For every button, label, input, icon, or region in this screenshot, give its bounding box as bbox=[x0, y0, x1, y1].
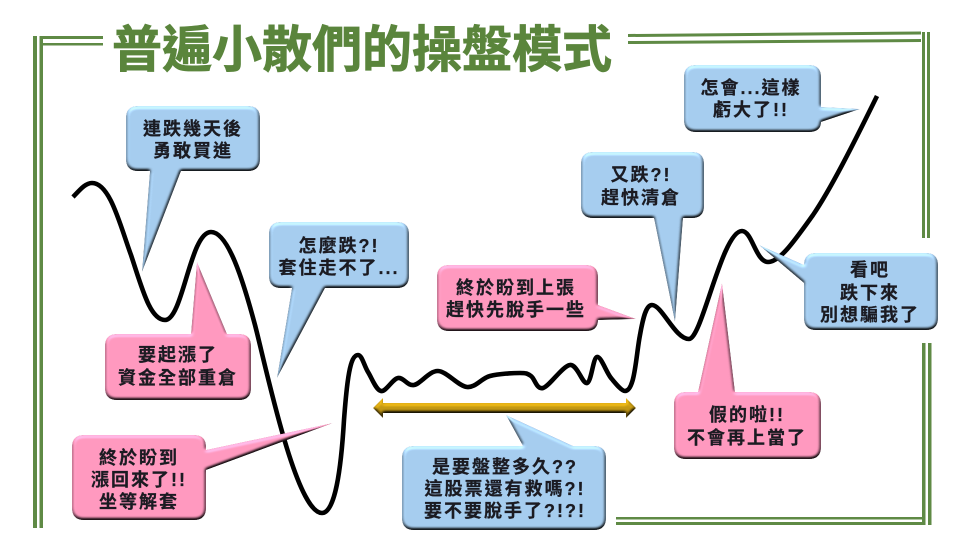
callout: sell some on rise bbox=[437, 265, 636, 331]
callout: won't be fooled by drop: 別想騙我了 bbox=[820, 305, 920, 325]
callout: how long consolidation: 是要盤整多久?? bbox=[432, 456, 578, 477]
callout: going all in: 要起漲了 bbox=[138, 345, 218, 365]
callout: waiting to break even bbox=[72, 423, 333, 520]
callout: buy after drop: 勇敢買進 bbox=[153, 141, 233, 161]
callout: it's fake bbox=[674, 283, 821, 459]
callout: lost big bbox=[684, 65, 860, 132]
callout: it's fake: 假的啦!! bbox=[709, 404, 785, 425]
callout: how long consolidation: 要不要脫手了?!?! bbox=[424, 501, 586, 521]
callout: sell some on rise: 終於盼到上張 bbox=[456, 277, 576, 298]
callout: stuck in position bbox=[269, 222, 409, 378]
title: 普遍小散們的操盤模式 bbox=[112, 22, 612, 78]
callout: how long consolidation: 這股票還有救嗎?! bbox=[424, 478, 586, 499]
callout: lost big: 虧大了!! bbox=[713, 100, 789, 120]
callout: clear position: 趕快清倉 bbox=[601, 187, 681, 208]
callout: won't be fooled by drop bbox=[759, 245, 938, 330]
callout: going all in: 資金全部重倉 bbox=[118, 367, 238, 388]
arrow: sideways consolidation range bbox=[373, 398, 636, 418]
callout: buy after drop bbox=[126, 106, 260, 272]
callout: how long consolidation bbox=[402, 415, 606, 530]
callout: it's fake: 不會再上當了 bbox=[687, 427, 807, 448]
callout: lost big: 怎會...這樣 bbox=[700, 77, 802, 98]
callout: clear position: 又跌?! bbox=[610, 165, 672, 185]
callout: waiting to break even: 終於盼到 bbox=[99, 447, 179, 468]
stock price curve bbox=[73, 96, 877, 513]
callout: buy after drop: 連跌幾天後 bbox=[143, 119, 243, 139]
callout: sell some on rise: 趕快先脫手一些 bbox=[446, 300, 586, 320]
callout: clear position bbox=[581, 152, 704, 322]
callout: waiting to break even: 坐等解套 bbox=[99, 491, 179, 512]
callout: waiting to break even: 漲回來了!! bbox=[91, 470, 187, 490]
callout: won't be fooled by drop: 看吧 bbox=[850, 260, 890, 280]
callout: going all in bbox=[105, 262, 251, 400]
callout: won't be fooled by drop: 跌下來 bbox=[840, 283, 900, 303]
callout: stuck in position: 套住走不了... bbox=[278, 258, 400, 278]
callout: stuck in position: 怎麼跌?! bbox=[298, 235, 380, 256]
